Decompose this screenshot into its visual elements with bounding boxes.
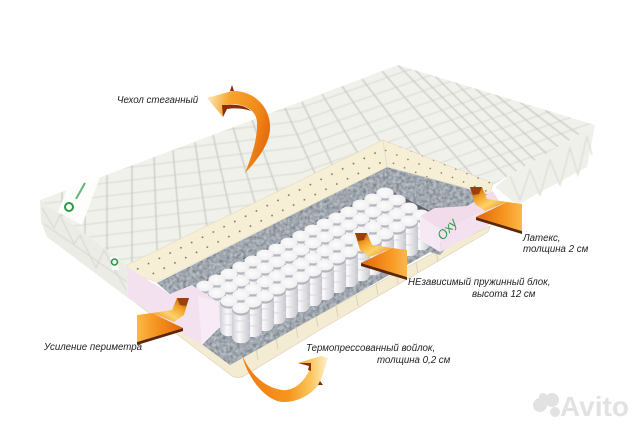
label: brand tag on cover (58, 177, 100, 225)
label: latex: толщина 2 см (523, 244, 589, 255)
bottom foam layer (128, 226, 490, 378)
logo on block: Oxy (434, 214, 461, 243)
independent spring block (196, 188, 430, 343)
label: felt: толщина 0,2 см (377, 355, 451, 366)
arrow: perimeter reinforcement (137, 298, 189, 345)
arrow: quilted cover (207, 85, 270, 173)
watermark: Avito: Avito (560, 391, 629, 422)
arrow: latex (470, 187, 522, 234)
label: spring block: высота 12 см (472, 289, 536, 300)
label: quilted cover: Чехол стеганный (117, 95, 199, 106)
arrow: spring block (355, 233, 407, 280)
perimeter block: left (127, 267, 220, 345)
label: latex: Латекс, (523, 233, 560, 244)
mattress (40, 65, 595, 402)
label: felt: Термопрессованный войлок, (306, 343, 435, 354)
panel: left side of quilted cover (40, 200, 128, 298)
label: perimeter reinforcement: Усиление периметра (43, 342, 143, 353)
label: small green tag (110, 256, 119, 270)
felt layer (157, 167, 490, 365)
perimeter block: right (420, 191, 500, 252)
panel: quilted top cover (40, 65, 594, 264)
latex layer: left strip (127, 140, 387, 282)
arrow: felt (242, 355, 328, 402)
panel: right side of quilted cover (495, 125, 595, 205)
latex layer: right strip (383, 140, 493, 194)
label: spring block: НЕзависимый пружинный блок, (408, 277, 550, 288)
spring gap shadow (197, 188, 432, 320)
